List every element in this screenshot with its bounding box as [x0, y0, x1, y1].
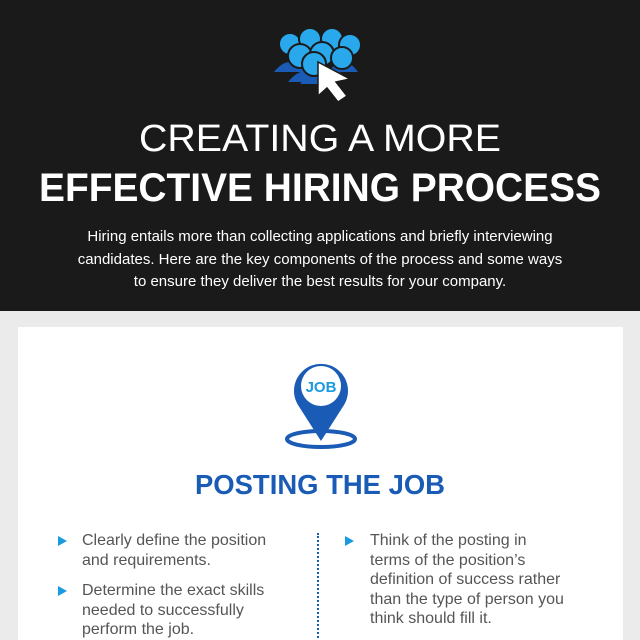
intro text: Hiring entails more than collecting applications and briefly interviewing candidates. Here are the key components of the process and some ways to ensure they deliver the best results for your company.: [78, 228, 562, 290]
panel: posting the job: [18, 327, 623, 640]
title: EFFECTIVE HIRING PROCESS: [39, 166, 601, 210]
icon: people with cursor: [274, 29, 360, 101]
title: [39, 118, 601, 210]
icon: job pin: JOB: [306, 379, 337, 396]
title: CREATING A MORE: [139, 118, 501, 160]
left bullets: [58, 532, 266, 638]
icon: job pin: [285, 364, 357, 449]
left bullets: Clearly define the position and requirements.: [82, 532, 266, 568]
left bullets: Determine the exact skills needed to successfully perform the job.: [82, 582, 264, 638]
header panel: [0, 0, 640, 311]
divider: [317, 533, 319, 640]
heading: POSTING THE JOB: [195, 469, 445, 500]
right bullets: Think of the posting in terms of the position’s definition of success rather than the type of person you think should fill it.: [370, 532, 564, 627]
